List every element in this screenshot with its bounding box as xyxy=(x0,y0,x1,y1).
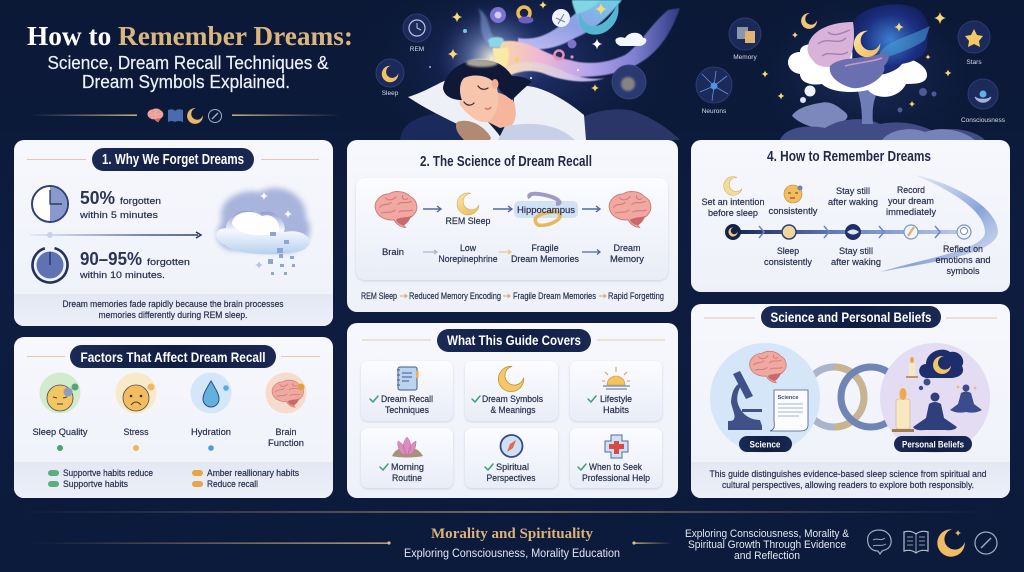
heading pill xyxy=(92,148,254,171)
interlocking rings xyxy=(804,367,901,427)
sleeping woman xyxy=(443,59,532,140)
heading pill xyxy=(70,345,276,368)
card: lifestyle habits xyxy=(570,361,662,421)
icon: half clock xyxy=(32,186,68,222)
stat: 50 percent: 50% xyxy=(80,188,115,208)
step 2: consistently xyxy=(768,206,818,216)
step 2: consistently xyxy=(764,257,813,267)
panel: how to remember dreams xyxy=(691,140,1010,292)
flow caption: Rapid Forgetting xyxy=(608,291,664,301)
heading pill: 1. Why We Forget Dreams xyxy=(102,151,244,168)
card: morning routine: Routine xyxy=(392,473,422,483)
card: dream symbols and meanings: & Meanings xyxy=(490,405,536,415)
arrow: time passing xyxy=(30,232,201,238)
caption xyxy=(710,469,986,490)
cosmic half of brain xyxy=(852,4,929,76)
factor: sleep quality xyxy=(32,372,88,451)
panel: the science of dream recall xyxy=(347,140,678,312)
factor: brain function xyxy=(266,372,306,448)
diagram card: Norepinephrine xyxy=(438,254,498,264)
icon: stars xyxy=(958,21,990,66)
icon: meditating figure xyxy=(913,392,957,430)
heading pill: Science and Personal Beliefs xyxy=(770,309,932,325)
heading pill: Factors That Affect Dream Recall xyxy=(80,349,266,365)
icon: memory xyxy=(729,18,761,61)
icon: dissolving cloud xyxy=(216,188,310,275)
swoosh xyxy=(880,175,998,272)
card: professional help: When to Seek xyxy=(589,462,642,472)
factor: sleep quality: Sleep Quality xyxy=(32,427,88,437)
footer statement: Exploring Consciousness, Morality & xyxy=(685,528,850,540)
step 5 xyxy=(936,244,990,276)
legend: Amber reallionary habits xyxy=(207,468,299,478)
footer statement: Spiritual Growth Through Evidence xyxy=(688,539,846,551)
legend: Reduce recall xyxy=(207,479,258,489)
step 3: after waking xyxy=(828,197,878,207)
heading: 2. The Science of Dream Recall xyxy=(420,154,592,170)
diagram card: Low xyxy=(460,243,476,253)
heading pill xyxy=(437,329,591,352)
science circle xyxy=(710,343,820,453)
step 4: your dream xyxy=(888,196,934,206)
icon: nearly full clock xyxy=(29,244,71,286)
card: morning routine xyxy=(361,428,453,488)
factor: hydration: Hydration xyxy=(191,427,231,437)
footer statement xyxy=(685,528,850,562)
step 1: Set an intention xyxy=(702,197,764,207)
step 3: Stay still xyxy=(839,246,873,256)
icon: galaxy orb xyxy=(612,65,646,99)
card: dream symbols and meanings xyxy=(465,361,558,421)
flow caption: REM Sleep xyxy=(361,291,397,301)
personal beliefs circle xyxy=(880,343,990,453)
step 4: Record xyxy=(897,185,925,195)
step 3: Stay still xyxy=(836,186,870,196)
factor: hydration xyxy=(190,372,232,451)
step 1 xyxy=(702,174,764,218)
icon: large candle xyxy=(892,388,914,432)
card: lifestyle habits: Habits xyxy=(603,405,630,415)
card: spiritual perspectives xyxy=(465,428,558,488)
legend xyxy=(48,468,299,489)
legend: Supportve habits reduce xyxy=(63,468,153,478)
step 1: before sleep xyxy=(708,208,758,218)
icon: small meditating figure xyxy=(950,384,982,413)
icon: stars: Stars xyxy=(966,59,982,66)
card: dream recall techniques: Techniques xyxy=(385,405,429,415)
heading: 4. How to Remember Dreams xyxy=(767,149,931,165)
legend: Supportve habits xyxy=(63,479,128,489)
caption: Dream memories fade rapidly because the brain processes xyxy=(62,299,284,309)
caption: memories differently during REM sleep. xyxy=(98,310,248,320)
hippocampus rings xyxy=(514,194,578,225)
card: lifestyle habits: Lifestyle xyxy=(600,394,632,404)
footer icons xyxy=(868,529,997,557)
heading pill: What This Guide Covers xyxy=(447,332,581,348)
subtitle xyxy=(48,52,329,92)
footer statement: and Reflection xyxy=(734,550,800,562)
panel: what this guide covers xyxy=(347,323,678,498)
footer heading: Morality and Spirituality xyxy=(431,526,594,542)
panel: why we forget dreams xyxy=(14,140,333,326)
hero illustration: sleeping woman with dream swirl xyxy=(355,0,685,160)
diagram card xyxy=(356,178,668,280)
main title: How to Remember Dreams: xyxy=(27,21,353,51)
subtitle: Science, Dream Recall Techniques & xyxy=(48,52,329,73)
card: morning routine: Morning xyxy=(391,462,424,472)
caption xyxy=(62,299,284,320)
step 3 xyxy=(828,186,881,267)
stat: 90-95 percent: within 10 minutes. xyxy=(79,270,165,280)
card: spiritual perspectives: Spiritual xyxy=(496,462,529,472)
card: dream recall techniques: Dream Recall xyxy=(381,394,433,404)
factor: brain function: Brain xyxy=(276,427,296,437)
panel: science and personal beliefs xyxy=(691,304,1010,498)
card: dream recall techniques xyxy=(361,361,453,421)
diagram card: Memory xyxy=(610,254,645,264)
diagram card: Dream xyxy=(614,243,640,253)
icon: neurons: Neurons xyxy=(702,108,727,115)
factor: stress xyxy=(116,372,156,451)
card: professional help xyxy=(570,428,662,488)
icon: consciousness: Consciousness xyxy=(961,117,1006,124)
step 2: Sleep xyxy=(777,246,799,256)
icon: REM clock xyxy=(403,14,431,53)
flow caption: Fragile Dream Memories xyxy=(513,291,596,301)
icon: science scroll: Science xyxy=(778,395,798,401)
icon: neurons xyxy=(696,67,732,115)
stat: 50 percent xyxy=(79,188,161,220)
stat: 50 percent: within 5 minutes xyxy=(79,210,159,220)
timeline xyxy=(725,224,971,240)
heading pill xyxy=(761,306,941,328)
card: spiritual perspectives: Perspectives xyxy=(486,473,536,483)
diagram card: Brain xyxy=(382,247,404,257)
stat: 90-95 percent xyxy=(79,249,190,280)
beliefs label pill: Personal Beliefs xyxy=(902,440,964,450)
hero illustration: brain with cosmic cloud xyxy=(696,0,1006,150)
caption: This guide distinguishes evidence-based sleep science from spiritual and xyxy=(710,469,986,479)
footer subheading: Exploring Consciousness, Morality Education xyxy=(404,548,620,560)
icon: microscope xyxy=(728,371,762,430)
step 3: after waking xyxy=(831,257,881,267)
stat: 90-95 percent: 90–95% xyxy=(80,249,142,269)
icon: night thought cloud xyxy=(919,350,963,390)
diagram card: Dream Memories xyxy=(511,254,579,264)
lower clouds xyxy=(780,102,985,140)
icon: consciousness xyxy=(961,79,1006,124)
pink half of brain xyxy=(807,22,854,67)
caption: cultural perspectives, allowing readers to explore both responsibly. xyxy=(722,480,974,490)
step 5: emotions and xyxy=(936,255,990,265)
step 5: symbols xyxy=(946,266,980,276)
title block xyxy=(27,21,353,92)
diagram card: Hippocampus xyxy=(517,205,576,215)
icon: REM clock: REM xyxy=(410,46,424,53)
factor: stress: Stress xyxy=(124,427,149,437)
science label pill: Science xyxy=(750,440,780,450)
thought cloud xyxy=(788,44,927,97)
flow caption: Reduced Memory Encoding xyxy=(409,291,501,301)
factor: brain function: Function xyxy=(268,438,304,448)
title divider with icons xyxy=(30,108,340,124)
diagram card: Fragile xyxy=(532,243,558,253)
stat: 90-95 percent: forgotten xyxy=(147,257,190,267)
dream symbols xyxy=(429,1,646,92)
flow caption xyxy=(361,291,664,301)
step 2 xyxy=(764,185,818,267)
icon: memory: Memory xyxy=(733,54,757,61)
diagram card: REM Sleep xyxy=(446,216,490,226)
subtitle: Dream Symbols Explained. xyxy=(82,71,290,92)
card: professional help: Professional Help xyxy=(582,473,650,483)
step 5: Reflect on xyxy=(943,244,983,254)
icon: sleep moon xyxy=(376,59,404,97)
step 4 xyxy=(886,185,937,217)
stat: 50 percent: forgotten xyxy=(120,196,161,206)
panel: factors that affect dream recall xyxy=(14,337,333,498)
blanket and pillow xyxy=(400,80,680,140)
icon: sleep moon: Sleep xyxy=(382,90,399,97)
step 4: immediately xyxy=(886,207,937,217)
footer xyxy=(20,512,997,562)
icon: small candle xyxy=(906,357,918,378)
card: dream symbols and meanings: Dream Symbols xyxy=(482,394,543,404)
